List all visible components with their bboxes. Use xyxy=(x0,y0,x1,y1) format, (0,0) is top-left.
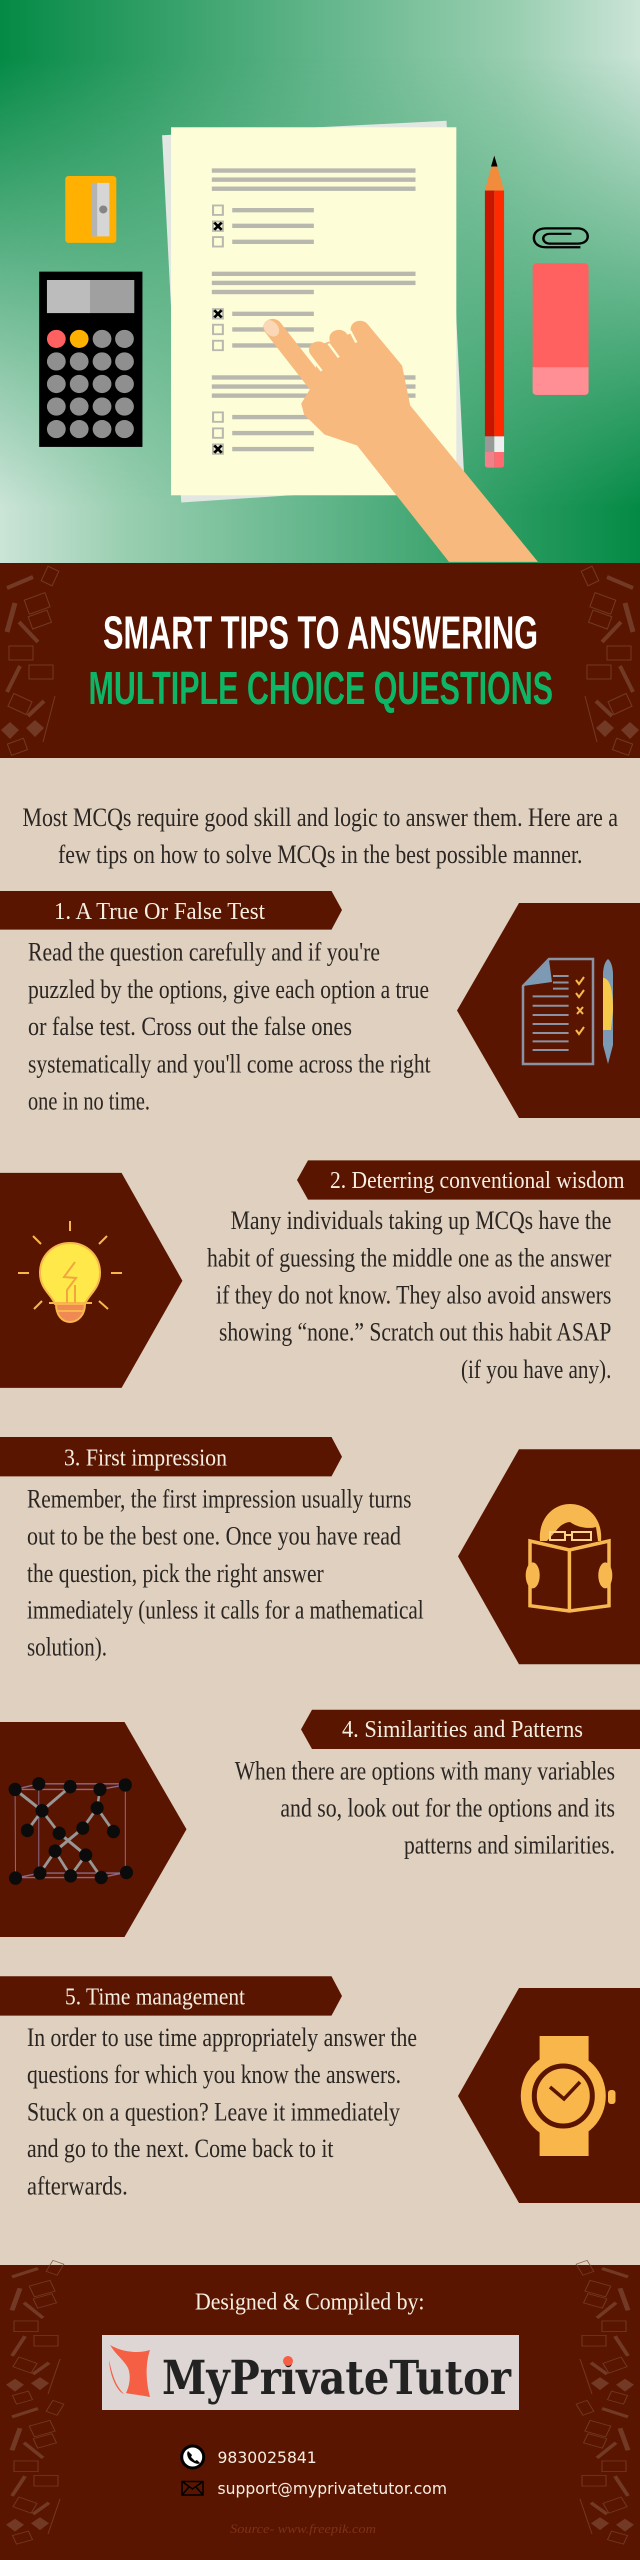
tip 1 hexagon panel xyxy=(457,903,640,1118)
tip 3 text: the question, pick the right answer xyxy=(27,1559,324,1588)
icon: sharpener xyxy=(65,176,116,243)
tip 4 text xyxy=(235,1756,615,1859)
tip 3 text: solution). xyxy=(27,1633,107,1662)
tip 5 text xyxy=(27,2023,417,2201)
tip 4 heading ribbon xyxy=(301,1710,640,1749)
tip 5 text: and go to the next. Come back to it xyxy=(27,2134,334,2163)
icon: wrist watch xyxy=(521,2036,616,2156)
tip 4 heading ribbon: 4. Similarities and Patterns xyxy=(342,1717,583,1743)
back sheet of paper xyxy=(162,121,464,503)
tip 3 text: out to be the best one. Once you have read xyxy=(27,1521,401,1550)
tip 1 heading ribbon xyxy=(0,891,342,930)
title band xyxy=(0,563,640,758)
tip 5 text: Stuck on a question? Leave it immediately xyxy=(27,2098,400,2126)
icon: molecular lattice xyxy=(9,1777,133,1885)
tip 5 hexagon panel xyxy=(458,1988,640,2203)
icon: hand pointing at answer xyxy=(261,318,538,562)
tip 1 heading ribbon: 1. A True Or False Test xyxy=(54,899,265,925)
tip 1 text: one in no time. xyxy=(28,1086,150,1115)
doodles: footer left xyxy=(6,2260,64,2544)
contact: email: support@myprivatetutor.com xyxy=(218,2479,447,2498)
tip 1 text: puzzled by the options, give each option a true xyxy=(28,975,429,1004)
icon: light bulb xyxy=(18,1221,122,1322)
tip 5 heading ribbon: 5. Time management xyxy=(65,1984,245,2010)
intro text xyxy=(22,803,618,869)
logo: MyPrivateTutor: MyPrivateTutor xyxy=(162,2351,512,2406)
tip 4 hexagon panel xyxy=(0,1722,186,1937)
logo: MyPrivateTutor xyxy=(102,2335,519,2410)
tip 1 text xyxy=(28,938,431,1115)
tip 3 hexagon panel xyxy=(458,1449,640,1664)
icon: calculator xyxy=(39,272,142,447)
footer credit: Designed & Compiled by: xyxy=(195,2290,424,2316)
icon: red pencil xyxy=(485,156,504,468)
tip 3 text xyxy=(27,1484,424,1662)
icon: checklist and pen xyxy=(523,959,613,1064)
icon: paperclip xyxy=(534,228,588,247)
contact: phone: 9830025841 xyxy=(218,2448,317,2467)
contact: phone xyxy=(182,2446,317,2468)
source note: Source- www.freepik.com xyxy=(230,2521,376,2536)
tip 5 text: afterwards. xyxy=(27,2172,128,2201)
tip 3 text: Remember, the first impression usually turns xyxy=(27,1484,411,1514)
tip 2 hexagon panel xyxy=(0,1173,182,1388)
tip 2 heading ribbon xyxy=(297,1160,640,1200)
hero illustration: exam paper on green desk xyxy=(0,0,640,563)
icon: eraser xyxy=(533,263,589,395)
tip 1 text: or false test. Cross out the false ones xyxy=(28,1012,352,1041)
doodles: title band left xyxy=(1,566,59,755)
tip 5 text: In order to use time appropriately answer the xyxy=(27,2023,417,2052)
tip 5 heading ribbon xyxy=(0,1976,342,2016)
tip 1 text: Read the question carefully and if you're xyxy=(28,938,380,967)
icon: person reading book xyxy=(526,1504,612,1611)
footer band xyxy=(0,2260,640,2560)
tip 5 text: questions for which you know the answers. xyxy=(27,2060,401,2089)
doodles: title band right xyxy=(581,566,639,755)
tip 1 text: systematically and you'll come across the right xyxy=(28,1050,431,1078)
tip 3 text: immediately (unless it calls for a mathematical xyxy=(27,1596,424,1625)
tip 3 heading ribbon xyxy=(0,1437,342,1476)
front sheet with questions xyxy=(171,127,456,495)
tip 3 heading ribbon: 3. First impression xyxy=(64,1446,227,1472)
doodles: footer right xyxy=(576,2260,634,2544)
tip 2 text xyxy=(207,1206,612,1384)
